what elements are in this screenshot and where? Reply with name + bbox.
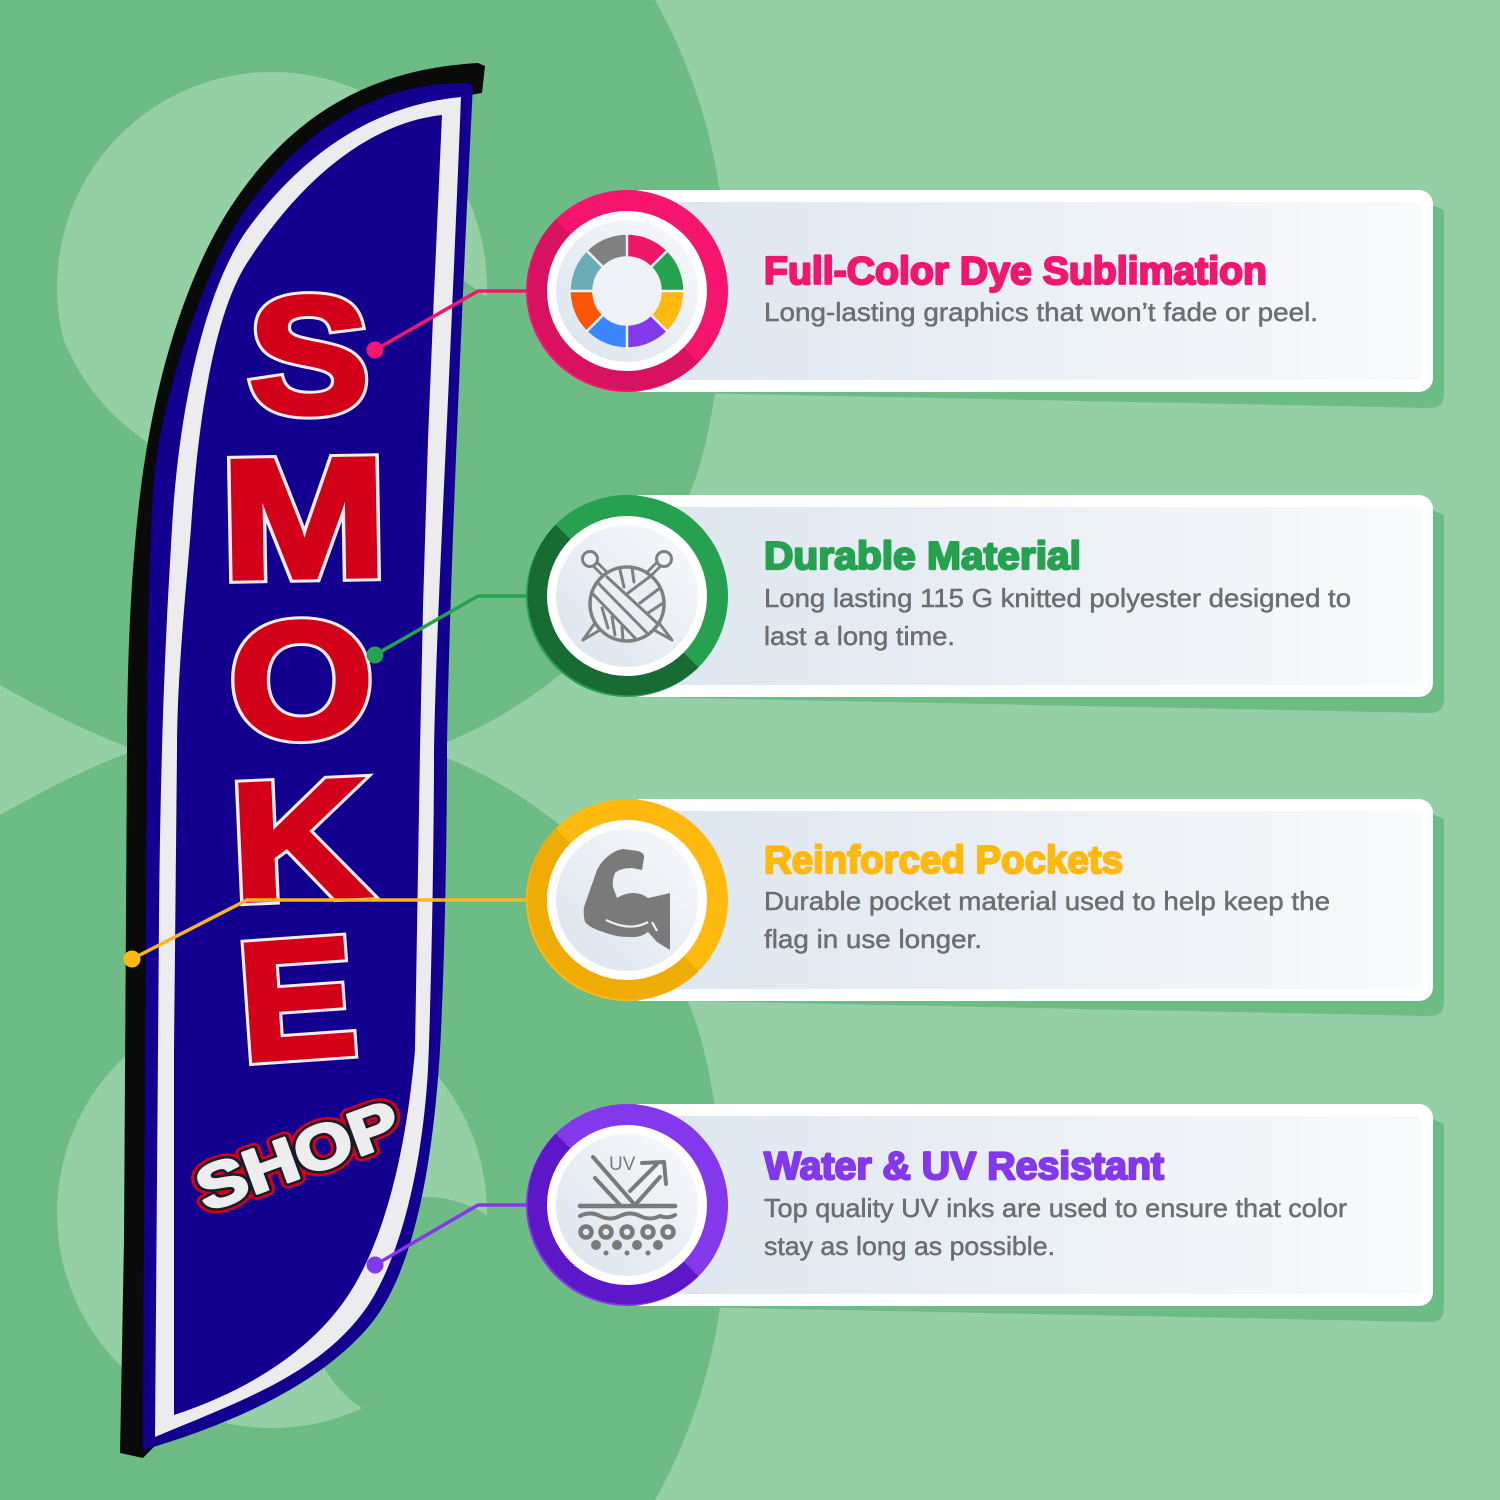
description: Durable pocket material used to help keep the [764, 886, 1330, 916]
flag letter S: S [249, 262, 369, 448]
flag white border [155, 97, 461, 1437]
connector: purple [366, 1205, 530, 1274]
panel: durable material [526, 495, 1444, 713]
description [764, 1193, 1347, 1261]
flag word SHOP: SHOP [187, 1088, 409, 1225]
flag letter K: K [227, 743, 372, 937]
feather flag [120, 63, 485, 1458]
flag letter M: M [220, 423, 388, 615]
flag letter S: S [249, 262, 369, 448]
icon: flexed arm [584, 849, 670, 950]
badge ring [526, 1104, 728, 1306]
description: flag in use longer. [764, 924, 982, 954]
panel: reinforced pockets [526, 799, 1444, 1016]
flag pole sleeve [120, 63, 485, 1458]
description: Top quality UV inks are used to ensure that color [764, 1193, 1347, 1223]
flag letter M: M [220, 423, 388, 615]
heading: Reinforced Pockets [764, 839, 1123, 882]
flag letter O: O [230, 588, 373, 773]
panel: full-color dye sublimation [526, 190, 1444, 408]
badge ring [526, 495, 728, 697]
badge ring [526, 799, 728, 1001]
icon: yarn ball and needles [582, 552, 672, 641]
flag letter O: O [230, 588, 373, 773]
icon: uv reflection on skin layers [580, 1154, 675, 1256]
panel: water and uv resistant [526, 1104, 1444, 1322]
connector: pink [366, 291, 530, 358]
flag letter E: E [232, 902, 362, 1097]
flag letter E: E [232, 902, 362, 1097]
description: stay as long as possible. [764, 1231, 1055, 1261]
flag blue edge [143, 83, 473, 1450]
flag letter K: K [227, 743, 372, 937]
flag blue field [174, 115, 442, 1415]
description: Long lasting 115 G knitted polyester designed to [764, 583, 1351, 613]
description: Long-lasting graphics that won’t fade or peel. [764, 297, 1318, 327]
heading: Full-Color Dye Sublimation [764, 250, 1267, 293]
description: last a long time. [764, 621, 955, 651]
description [764, 886, 1330, 954]
flag word SHOP: SHOP [187, 1088, 409, 1225]
icon: color wheel [569, 233, 685, 349]
icon: uv reflection on skin layers: UV [609, 1154, 636, 1175]
heading: Water & UV Resistant [764, 1145, 1164, 1188]
heading: Durable Material [764, 535, 1081, 578]
connector: green [366, 596, 530, 664]
description [764, 583, 1351, 651]
badge ring [526, 190, 728, 392]
connector: yellow [124, 900, 530, 968]
flag word SHOP: SHOP [187, 1088, 409, 1225]
